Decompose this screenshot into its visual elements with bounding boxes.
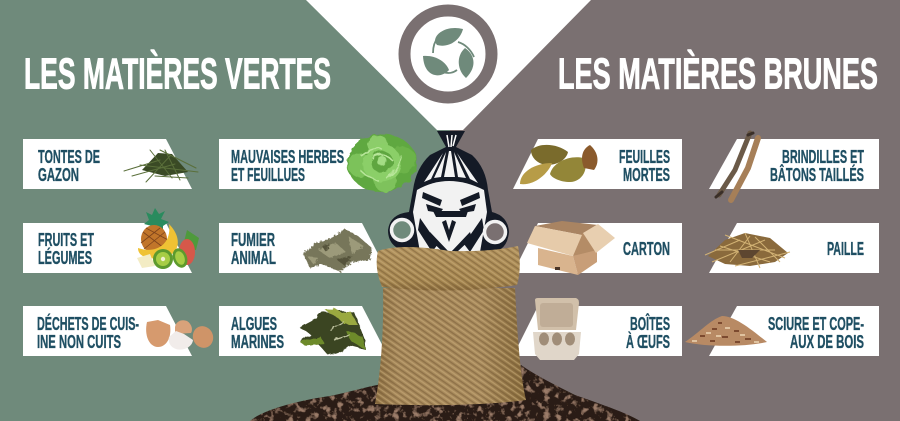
card: paille: PAILLE	[827, 239, 864, 259]
card: mauvaises herbes et feuillues	[219, 134, 417, 192]
card: déchets de cuisine non cuits: DÉCHETS DE CUIS-	[37, 313, 139, 334]
card: boîtes à oeufs: À ŒUFS	[626, 331, 670, 352]
card: mauvaises herbes et feuillues: MAUVAISES HERBES	[231, 147, 344, 167]
card: boîtes à oeufs: BOÎTES	[630, 313, 670, 334]
card: fruits et légumes	[23, 208, 199, 273]
card: fumier animal: FUMIER	[231, 230, 275, 250]
icon: egg shells	[146, 320, 217, 351]
card: algues marines: MARINES	[231, 332, 284, 352]
icon: egg carton	[533, 298, 581, 360]
icon: twigs	[716, 133, 758, 200]
face	[413, 181, 487, 252]
sack rolled top weave	[377, 246, 520, 291]
dome stripes	[424, 151, 478, 183]
card: fruits et légumes: LÉGUMES	[38, 247, 92, 268]
icon: lettuce	[347, 134, 417, 192]
white V wedge	[306, 0, 591, 130]
card: fumier animal: ANIMAL	[231, 248, 276, 268]
icon: dead leaves	[520, 145, 597, 184]
card: feuilles mortes	[513, 139, 682, 189]
panel: green background	[0, 0, 450, 421]
icon: recycling leaves badge	[404, 10, 492, 98]
mask silhouette	[388, 131, 509, 252]
card: mauvaises herbes et feuillues: ET FEUILLUES	[231, 165, 305, 185]
sack body weave	[375, 288, 526, 405]
card: paille	[705, 223, 879, 273]
icon: fruits	[137, 208, 199, 270]
soil mound	[250, 365, 640, 421]
icon: sawdust pile	[685, 316, 767, 346]
card: algues marines: ALGUES	[231, 314, 277, 334]
burlap sack	[375, 246, 526, 405]
card: carton: CARTON	[623, 239, 670, 259]
ear rings	[392, 220, 412, 240]
icon: manure	[303, 229, 372, 272]
card: boîtes à oeufs	[513, 298, 682, 360]
icon: seaweed	[299, 308, 366, 355]
sack rolled top	[377, 246, 520, 291]
card: carton	[513, 221, 682, 275]
card: déchets de cuisine non cuits	[23, 306, 217, 356]
icon: straw pile	[705, 233, 790, 268]
card: brindilles et bâtons taillés	[709, 133, 879, 200]
heading: les matières vertes: LES MATIÈRES VERTES	[24, 48, 331, 98]
card: fumier animal	[219, 223, 388, 273]
sack body	[375, 288, 526, 405]
card: tontes de gazon: GAZON	[38, 165, 79, 185]
icon: grass clippings	[124, 150, 198, 182]
card: fruits et légumes: FRUITS ET	[38, 230, 94, 250]
panel: brown background	[450, 0, 900, 421]
card: déchets de cuisine non cuits: INE NON CUITS	[37, 332, 121, 352]
card: feuilles mortes: MORTES	[623, 165, 670, 185]
card: algues marines	[219, 306, 388, 356]
card: feuilles mortes: FEUILLES	[619, 147, 670, 167]
card: sciure et copeaux de bois	[685, 306, 879, 356]
face features	[418, 192, 484, 252]
card: tontes de gazon	[23, 139, 198, 189]
icon: open cardboard box	[527, 221, 615, 275]
knot stripes	[447, 135, 456, 147]
logo: tribal mask	[388, 131, 509, 252]
card: tontes de gazon: TONTES DE	[38, 147, 100, 167]
